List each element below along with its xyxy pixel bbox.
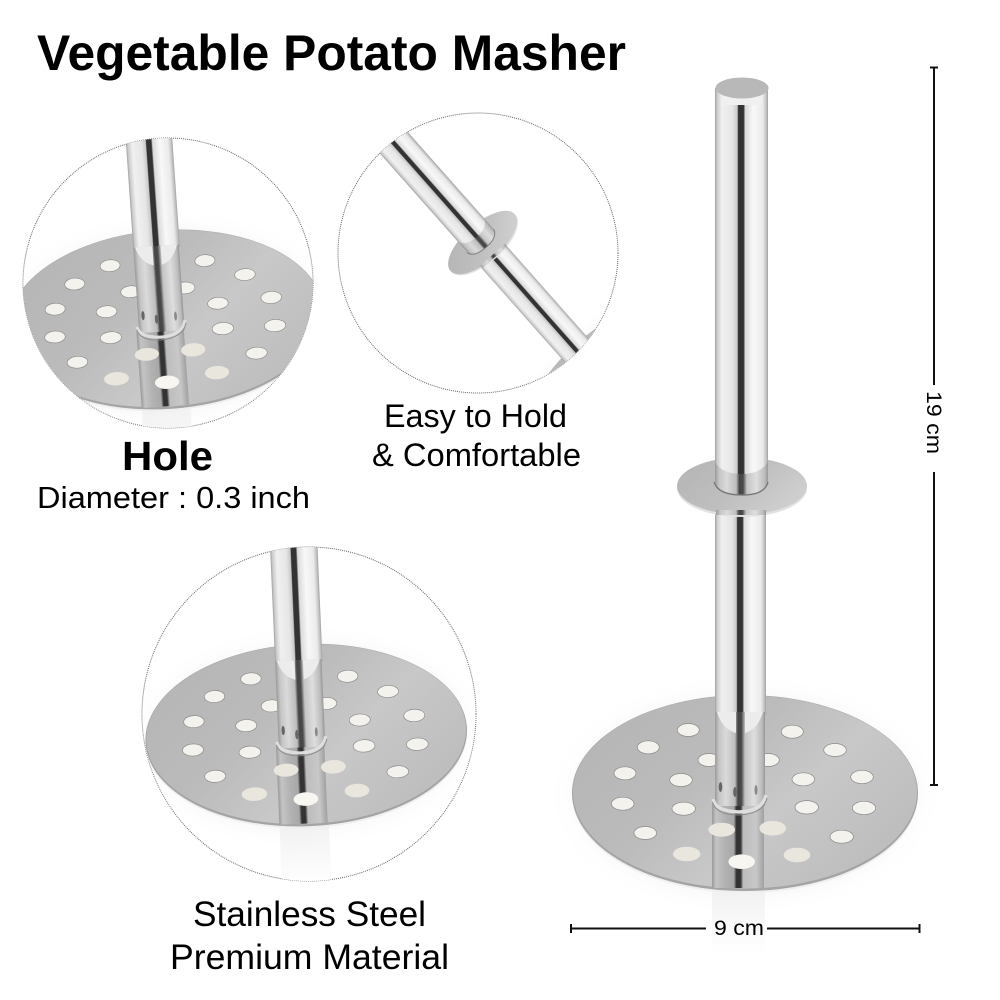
circle detail: handle flange — [338, 112, 618, 394]
caption: easy to hold: & Comfortable — [372, 437, 581, 473]
dimension: height 19 cm — [922, 68, 945, 785]
reflection under disc — [712, 888, 765, 954]
perforated disc — [572, 695, 918, 893]
dimension: width 9 cm — [571, 917, 920, 940]
dimension: width 9 cm: 9 cm — [714, 917, 764, 940]
caption: easy to hold: Easy to Hold — [384, 398, 567, 434]
heading: hole: Hole — [122, 433, 213, 479]
upper shaft — [714, 78, 768, 495]
disc shadow — [545, 673, 945, 917]
circle detail: stainless steel disc — [142, 546, 476, 882]
flange — [677, 458, 807, 517]
caption: stainless steel premium material: Stainless Steel — [193, 895, 426, 934]
title: Vegetable Potato Masher — [37, 25, 626, 81]
text: hole diameter: Diameter : 0.3 inch — [37, 480, 310, 515]
dimension: height 19 cm: 19 cm — [922, 391, 945, 454]
main product: potato masher — [545, 78, 945, 954]
caption: stainless steel premium material — [170, 895, 449, 977]
caption: stainless steel premium material: Premium Material — [170, 938, 449, 977]
caption: easy to hold — [372, 398, 581, 473]
lower shaft — [712, 505, 767, 815]
circle detail: perforated disc holes — [22, 138, 314, 428]
